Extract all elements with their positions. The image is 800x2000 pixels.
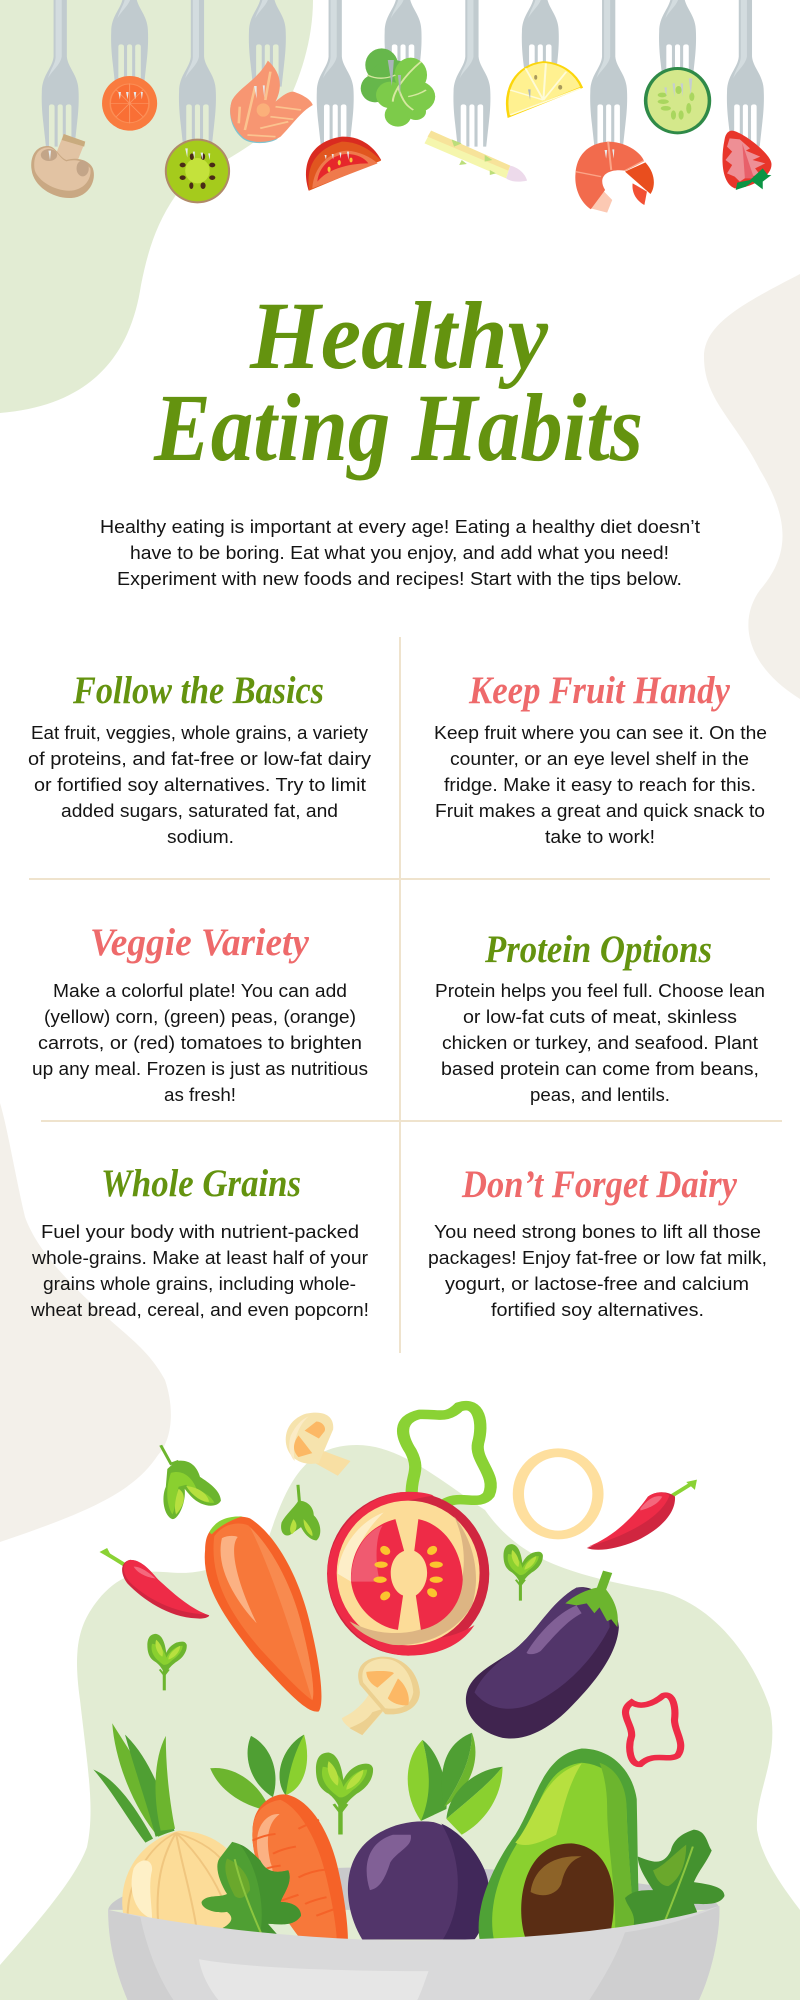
icon: chili left bbox=[99, 1548, 209, 1619]
icon: sprig right bbox=[503, 1544, 543, 1601]
fork 2 bbox=[111, 0, 148, 87]
panel: dont forget dairy bbox=[428, 1163, 767, 1320]
text: dont forget dairy body: fortified soy alternatives. bbox=[491, 1300, 704, 1320]
text: keep fruit handy body: Keep fruit where you can see it. On the bbox=[434, 723, 767, 743]
text: protein options body: Protein helps you feel full. Choose lean bbox=[435, 981, 765, 1001]
icon: sprig big bbox=[316, 1752, 373, 1834]
fork 5 bbox=[317, 0, 354, 147]
heading: keep fruit handy: Keep Fruit Handy bbox=[468, 669, 731, 712]
hanging forks row with food bbox=[31, 0, 771, 213]
icon: sprig upper left bbox=[161, 1445, 221, 1519]
food: tomato wedge bbox=[306, 137, 381, 191]
food: lemon wedge bbox=[507, 62, 582, 117]
icon: onion with greens bbox=[93, 1723, 242, 1934]
panel: keep fruit handy bbox=[434, 669, 767, 847]
text: dont forget dairy body: You need strong bones to lift all those bbox=[434, 1222, 761, 1242]
text: keep fruit handy body: take to work! bbox=[545, 827, 655, 847]
fork 7 bbox=[453, 0, 490, 147]
text: veggie variety body: carrots, or (red) tomatoes to brighten bbox=[38, 1033, 362, 1053]
background blob: green top left bbox=[0, 0, 313, 413]
title: Eating Habits bbox=[153, 374, 643, 481]
text: protein options body: or low-fat cuts of meat, skinless bbox=[463, 1007, 737, 1027]
text: whole grains body bbox=[30, 1222, 369, 1320]
heading: veggie variety: Veggie Variety bbox=[90, 921, 310, 964]
text: whole grains body: whole-grains. Make at least half of your bbox=[31, 1248, 368, 1268]
text: keep fruit handy body: fridge. Make it easy to reach for this. bbox=[444, 775, 756, 795]
text: follow the basics body: added sugars, saturated fat, and bbox=[61, 801, 338, 821]
text: whole grains body: wheat bread, cereal, and even popcorn! bbox=[30, 1300, 369, 1320]
icon: plum with leaves bbox=[348, 1733, 503, 1940]
text: veggie variety body: (yellow) corn, (green) peas, (orange) bbox=[44, 1007, 356, 1027]
icon: green pepper ring bbox=[403, 1406, 491, 1503]
text: follow the basics body: Eat fruit, veggies, whole grains, a variety bbox=[31, 723, 368, 743]
text: dont forget dairy body: packages! Enjoy fat-free or low fat milk, bbox=[428, 1248, 767, 1268]
text: dont forget dairy body: yogurt, or lactose-free and calcium bbox=[445, 1274, 749, 1294]
intro paragraph: Healthy eating is important at every age! Eating a healthy diet doesn’t bbox=[100, 517, 700, 537]
icon: carrot with greens bbox=[210, 1735, 348, 1940]
title bbox=[153, 282, 643, 481]
text: veggie variety body: as fresh! bbox=[164, 1085, 236, 1105]
heading: dont forget dairy: Don’t Forget Dairy bbox=[461, 1163, 738, 1206]
text: protein options body: peas, and lentils. bbox=[530, 1085, 670, 1105]
icon: eggplant bbox=[466, 1571, 619, 1739]
panel: whole grains bbox=[30, 1162, 369, 1320]
text: follow the basics body: sodium. bbox=[167, 827, 234, 847]
intro paragraph bbox=[100, 517, 700, 589]
icon: leafy sprig left bbox=[202, 1842, 301, 1936]
heading: follow the basics: Follow the Basics bbox=[72, 669, 324, 712]
food: asparagus bbox=[424, 131, 527, 182]
panel: veggie variety bbox=[32, 921, 368, 1105]
icon: large carrot half bbox=[205, 1516, 321, 1712]
icon: chili right bbox=[587, 1480, 697, 1550]
fork 11 bbox=[727, 0, 764, 147]
text: protein options body: chicken or turkey, and seafood. Plant bbox=[442, 1033, 758, 1053]
icon: mushroom small bbox=[286, 1413, 351, 1476]
fork 4 bbox=[249, 0, 286, 87]
intro paragraph: have to be boring. Eat what you enjoy, and add what you need! bbox=[130, 543, 669, 563]
text: veggie variety body: up any meal. Frozen is just as nutritious bbox=[32, 1059, 368, 1079]
text: follow the basics body: of proteins, and fat-free or low-fat dairy bbox=[28, 749, 371, 769]
fork 3 bbox=[179, 0, 216, 147]
salad bowl illustration bbox=[93, 1406, 724, 2000]
food: carrot slice bbox=[102, 76, 157, 131]
icon: bowl bbox=[108, 1906, 719, 2000]
food: cucumber bbox=[644, 67, 711, 134]
intro paragraph: Experiment with new foods and recipes! Start with the tips below. bbox=[117, 569, 682, 589]
food: salmon bbox=[230, 61, 313, 143]
text: dont forget dairy body bbox=[428, 1222, 767, 1320]
text: protein options body: based protein can come from beans, bbox=[441, 1059, 759, 1079]
text: keep fruit handy body bbox=[434, 723, 767, 847]
food: mushroom bbox=[31, 134, 94, 198]
food: shrimp bbox=[575, 142, 654, 213]
fork 9 bbox=[590, 0, 627, 147]
text: whole grains body: grains whole grains, including whole- bbox=[43, 1274, 356, 1294]
icon: halved tomato bbox=[327, 1492, 489, 1656]
heading: protein options: Protein Options bbox=[484, 928, 712, 971]
icon: onion ring bbox=[518, 1453, 598, 1535]
text: whole grains body: Fuel your body with nutrient-packed bbox=[41, 1222, 359, 1242]
icon: bowl back rim bbox=[108, 1867, 719, 1910]
icon: avocado bbox=[479, 1749, 640, 1940]
grid dividers bbox=[29, 637, 782, 1353]
text: keep fruit handy body: Fruit makes a great and quick snack to bbox=[435, 801, 765, 821]
text: protein options body bbox=[435, 981, 765, 1105]
text: follow the basics body: or fortified soy alternatives. Try to limit bbox=[34, 775, 366, 795]
icon: mushroom large bbox=[342, 1657, 420, 1735]
icon: leafy sprig right bbox=[625, 1830, 724, 1930]
icon: red pepper ring bbox=[625, 1695, 681, 1764]
text: veggie variety body: Make a colorful plate! You can add bbox=[53, 981, 347, 1001]
fork 6 bbox=[385, 0, 422, 87]
fork 1 bbox=[42, 0, 79, 147]
icon: sprig left bbox=[147, 1634, 187, 1690]
fork 10 bbox=[659, 0, 696, 87]
food: strawberry bbox=[722, 131, 771, 190]
title: Healthy bbox=[249, 282, 548, 389]
text: veggie variety body bbox=[32, 981, 368, 1105]
panel: follow the basics bbox=[28, 669, 371, 847]
icon: sprig center bbox=[281, 1485, 320, 1541]
panel: protein options bbox=[435, 928, 765, 1105]
background blob: beige right bbox=[704, 274, 800, 699]
food: kiwi bbox=[165, 139, 230, 203]
fork 8 bbox=[522, 0, 559, 87]
background blob: beige left bbox=[0, 1103, 171, 1542]
text: follow the basics body bbox=[28, 723, 371, 847]
heading: whole grains: Whole Grains bbox=[101, 1162, 301, 1205]
food: lettuce bbox=[361, 48, 435, 127]
background blob: green bottom bbox=[0, 1445, 800, 2000]
text: keep fruit handy body: counter, or an eye level shelf in the bbox=[450, 749, 749, 769]
